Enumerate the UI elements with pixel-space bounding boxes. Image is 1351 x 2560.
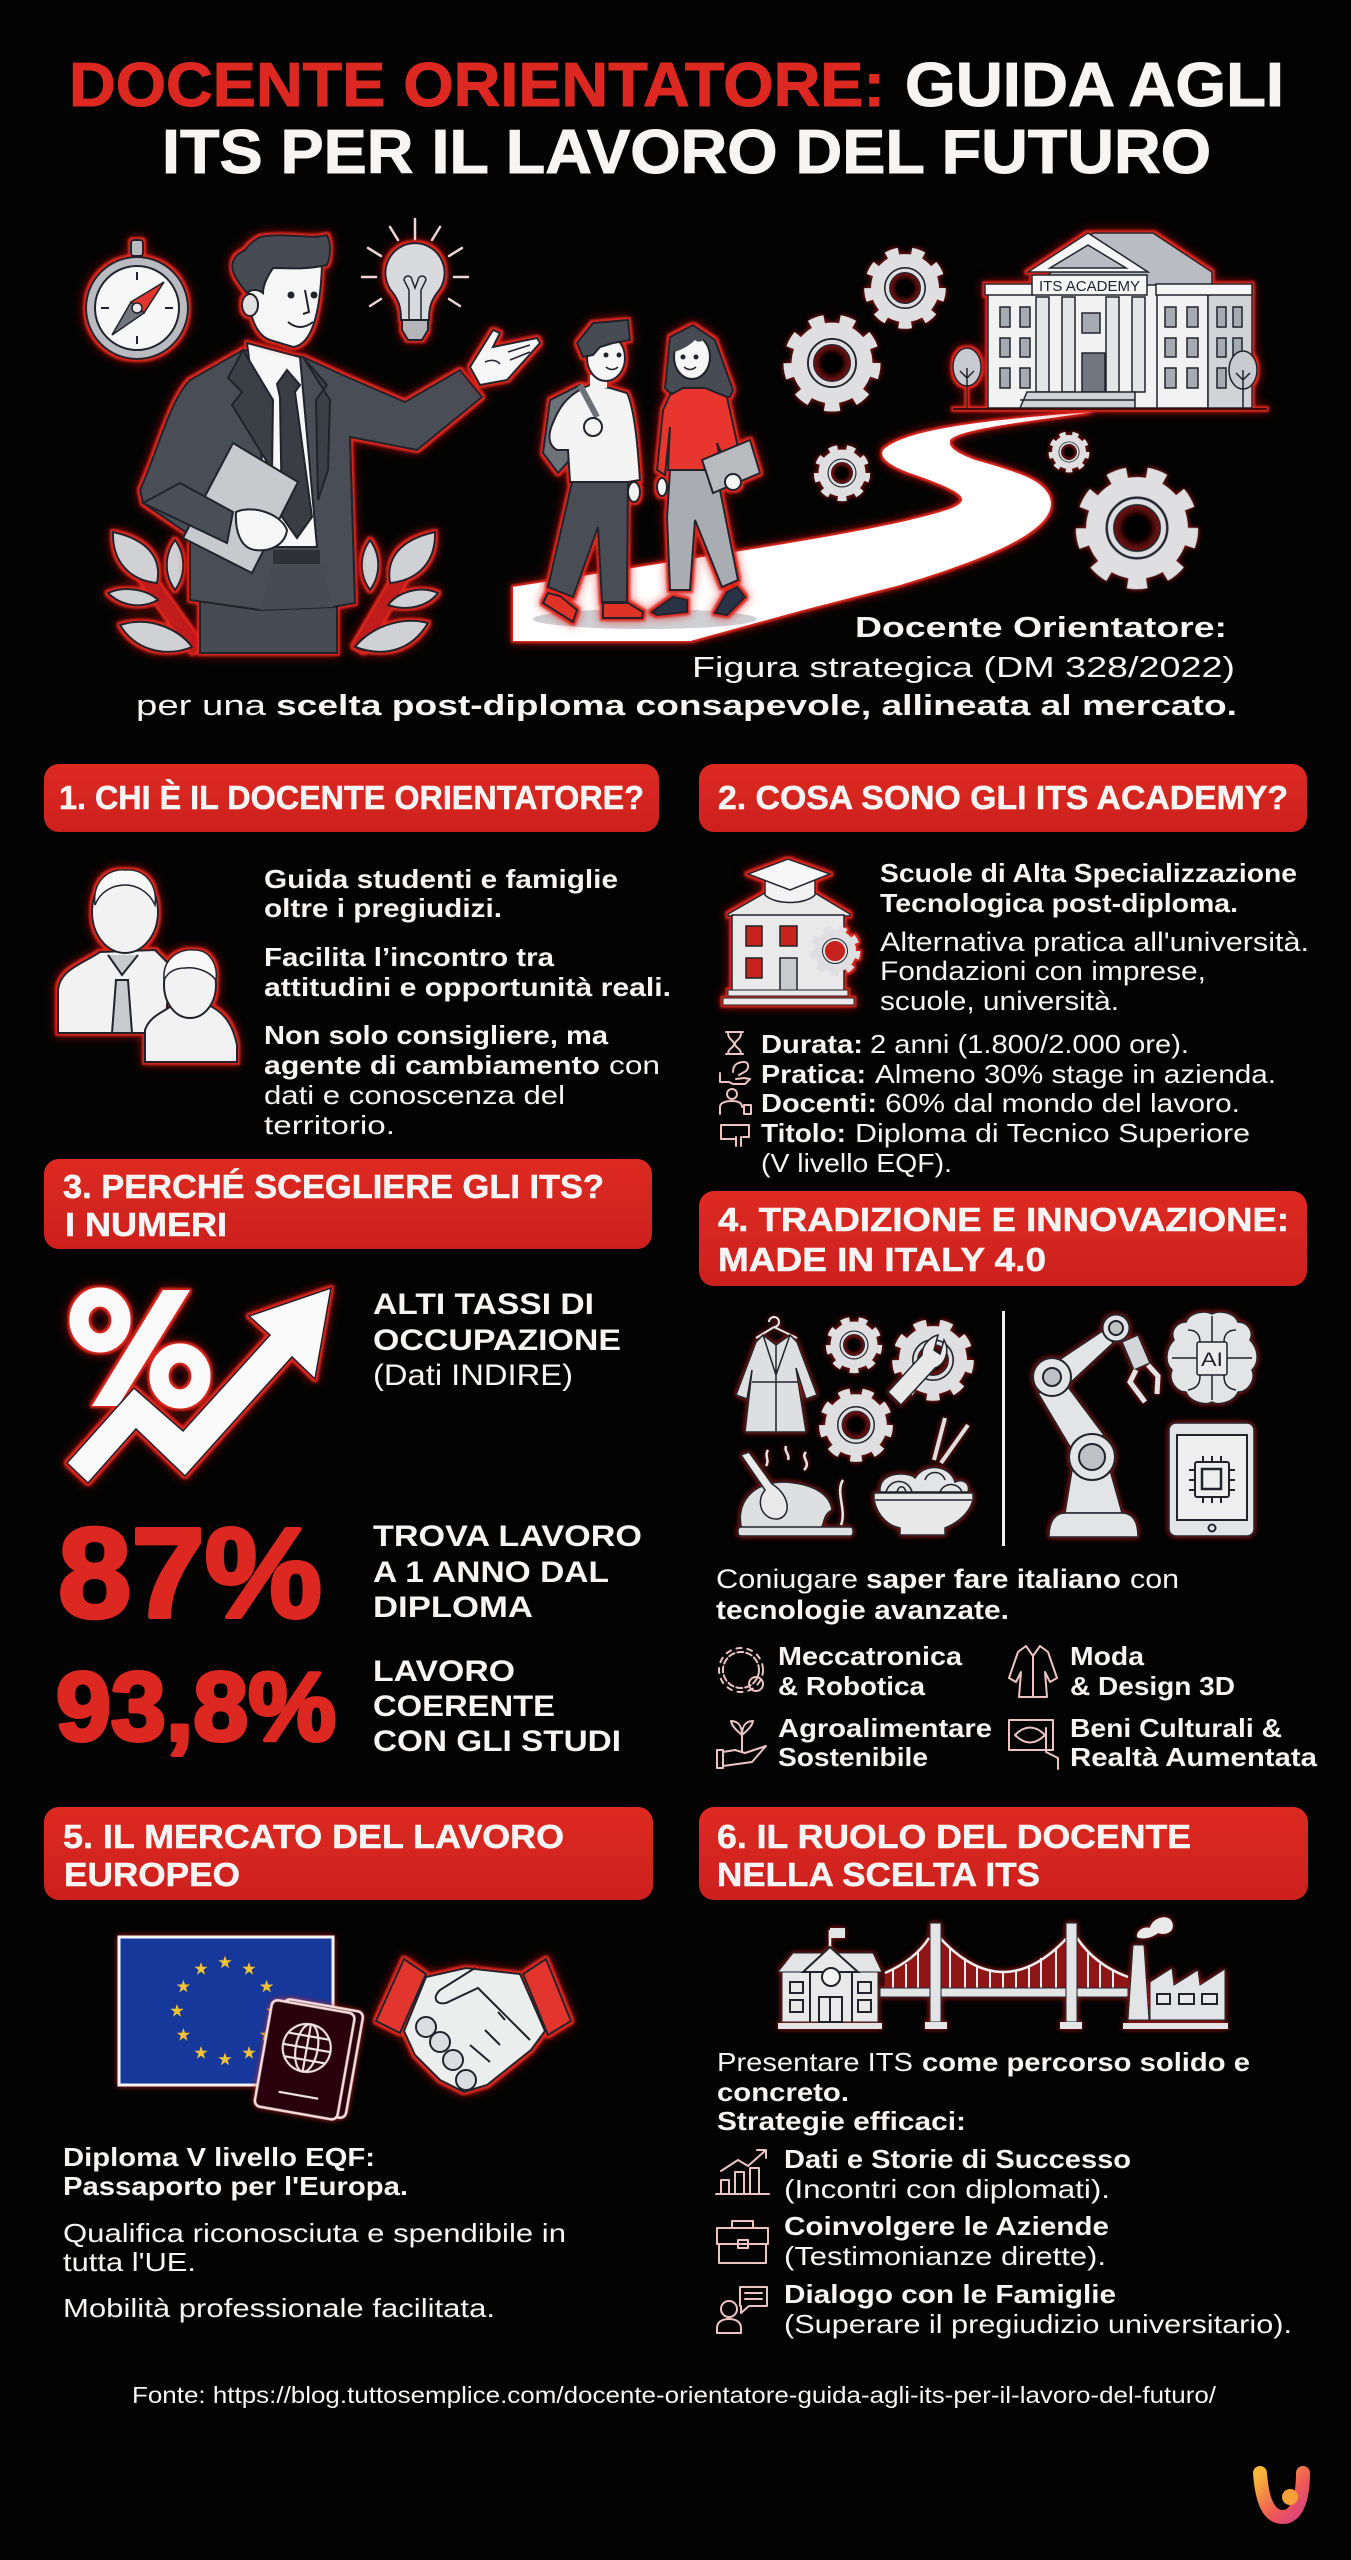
list icons: [720, 1032, 751, 1146]
facts list: 2 anni (1.800/2.000 ore).: [870, 1029, 1189, 1059]
heading 5: 5. IL MERCATO DEL LAVORO: [63, 1818, 564, 1855]
icon: light bulb: [362, 219, 468, 340]
facts list: Diploma di Tecnico Superiore: [855, 1118, 1250, 1148]
text block: saper fare italiano: [866, 1564, 1121, 1594]
icon: school-bridge-factory: [778, 1917, 1228, 2029]
stat: employment: (Dati INDIRE): [373, 1359, 573, 1392]
text block: [717, 2047, 1250, 2136]
source line: Fonte: https://blog.tuttosemplice.com/docente-orientatore-guida-agli-its-per-il-lavoro-del-futuro/: [132, 2382, 1217, 2408]
text block: Strategie efficaci:: [717, 2106, 966, 2136]
text block: agente di cambiamento: [264, 1050, 600, 1080]
text block: [716, 1564, 1179, 1625]
sector: moda: [1070, 1641, 1235, 1701]
text block: Alternativa pratica all'università.: [880, 927, 1309, 957]
heading 1: [44, 764, 659, 832]
sector: agroalimentare: Sostenibile: [778, 1742, 928, 1772]
stat: employment: ALTI TASSI DI: [373, 1288, 594, 1321]
divider: [1002, 1311, 1005, 1546]
text block: Tecnologica post-diploma.: [880, 888, 1238, 918]
text block: oltre i pregiudizi.: [264, 893, 502, 923]
heading 6: [699, 1807, 1308, 1900]
icon: compass: [86, 240, 188, 359]
students shadow: [533, 609, 757, 629]
strategy: families: Dialogo con le Famiglie: [784, 2279, 1116, 2309]
text block: Mobilità professionale facilitata.: [63, 2293, 495, 2323]
subtitle: Figura strategica (DM 328/2022): [692, 652, 1235, 684]
facts list: Pratica:: [761, 1059, 866, 1089]
strategy: families: [784, 2279, 1292, 2339]
heading 1: 1. CHI È IL DOCENTE ORIENTATORE?: [59, 779, 644, 816]
logo: [1260, 2473, 1303, 2517]
stat: 87%: 87%: [58, 1502, 322, 1645]
heading 2: 2. COSA SONO GLI ITS ACADEMY?: [718, 779, 1288, 816]
text block: dati e conoscenza del: [264, 1080, 565, 1110]
icon: percent and rising arrow: [67, 1288, 331, 1483]
icon: robe: [736, 1317, 817, 1432]
facts list: [761, 1029, 1276, 1178]
panel: cosa sono gli ITS Academy: [699, 764, 1309, 1178]
stat: 87%: TROVA LAVORO: [373, 1520, 642, 1553]
stat: 93,8%: CON GLI STUDI: [373, 1725, 621, 1758]
icon: school: [778, 1928, 882, 2029]
head: [232, 235, 330, 347]
icon: EU flag: [119, 1937, 333, 2085]
icon: robot arm: [1033, 1314, 1158, 1537]
panel: ruolo del docente: [699, 1807, 1308, 2339]
student: boy: [543, 320, 643, 622]
text block: Passaporto per l'Europa.: [63, 2171, 408, 2201]
heading 5: EUROPEO: [64, 1856, 240, 1893]
icon: AI brain: AI: [1201, 1350, 1223, 1371]
text block: concreto.: [717, 2077, 849, 2107]
facts list: Almeno 30% stage in azienda.: [875, 1059, 1276, 1089]
icon: growth chart: [716, 2150, 769, 2194]
stat: 87%: [58, 1502, 642, 1645]
text block: Presentare ITS: [717, 2047, 913, 2077]
icon: briefcase: [717, 2221, 768, 2263]
title: ITS PER IL LAVORO DEL FUTURO: [162, 118, 1211, 187]
panel: perché scegliere gli ITS: [44, 1159, 652, 1761]
icon: chicken: [738, 1446, 853, 1536]
subtitle: [136, 612, 1237, 722]
heading 3: I NUMERI: [65, 1206, 227, 1243]
icon: person with speech bubble: [717, 2287, 767, 2333]
panel: chi è il docente orientatore: [44, 764, 671, 1140]
stat: 93,8%: LAVORO: [373, 1655, 515, 1688]
text block: come percorso solido e: [922, 2047, 1250, 2077]
text block: Coniugare: [716, 1564, 858, 1594]
sector: moda: Moda: [1070, 1641, 1145, 1671]
text block: attitudini e opportunità reali.: [264, 972, 671, 1002]
icon: gears and wrench: [824, 1320, 969, 1457]
title: GUIDA AGLI: [905, 51, 1284, 120]
hero illustration: [86, 219, 1267, 653]
text block: con: [1130, 1564, 1179, 1594]
sector: meccatronica: & Robotica: [778, 1671, 926, 1701]
gears: [790, 252, 1190, 581]
winding road: [513, 412, 1093, 641]
icon: AR screen with eye: [1009, 1720, 1058, 1769]
stat: employment: OCCUPAZIONE: [373, 1324, 621, 1357]
text block: Facilita l’incontro tra: [264, 942, 555, 972]
icon: handshake: [376, 1959, 571, 2092]
text block: Scuole di Alta Specializzazione: [880, 858, 1297, 888]
facts list: Docenti:: [761, 1088, 877, 1118]
text block: Qualifica riconosciuta e spendibile in: [63, 2218, 566, 2248]
icon: AI brain: [1167, 1312, 1257, 1404]
heading 4: MADE IN ITALY 4.0: [718, 1241, 1046, 1278]
sector: meccatronica: Meccatronica: [778, 1641, 963, 1671]
icon: passport: [254, 1996, 364, 2122]
text block: [264, 864, 671, 1140]
facts list: Durata:: [761, 1029, 863, 1059]
text block: [63, 2142, 566, 2323]
text block: [880, 858, 1309, 1016]
icon: factory: [1123, 1917, 1228, 2029]
heading 3: 3. PERCHÉ SCEGLIERE GLI ITS?: [63, 1168, 604, 1205]
text block: territorio.: [264, 1110, 395, 1140]
icon: noodle bowl: [874, 1418, 973, 1535]
facts list: (V livello EQF).: [761, 1148, 952, 1178]
text block: Guida studenti e famiglie: [264, 864, 618, 894]
strategy: companies: Coinvolgere le Aziende: [784, 2211, 1109, 2241]
heading 6: NELLA SCELTA ITS: [717, 1856, 1040, 1893]
sector: agroalimentare: [778, 1713, 992, 1772]
subtitle: scelta post-diploma consapevole, allineata al mercato.: [276, 690, 1237, 722]
open hand: [470, 330, 540, 385]
stat: 93,8%: 93,8%: [56, 1652, 336, 1761]
text block: Diploma V livello EQF:: [63, 2142, 375, 2172]
subtitle: per una: [136, 690, 267, 722]
text block: Fondazioni con imprese,: [880, 956, 1206, 986]
stat: 93,8%: COERENTE: [373, 1690, 555, 1723]
heading 2: [699, 764, 1307, 832]
sector: beni culturali: Beni Culturali &: [1070, 1713, 1282, 1743]
heading 4: 4. TRADIZIONE E INNOVAZIONE:: [718, 1201, 1289, 1238]
stat: 87%: A 1 ANNO DAL: [373, 1556, 609, 1589]
facts list: 60% dal mondo del lavoro.: [885, 1088, 1240, 1118]
title: [69, 51, 1284, 187]
stat: 87%: DIPLOMA: [373, 1591, 533, 1624]
panel: mercato del lavoro europeo: [44, 1807, 653, 2323]
sectors grid: [717, 1641, 1318, 1772]
heading 5: [44, 1807, 653, 1900]
icon: coat: [1009, 1646, 1057, 1697]
icon: plant in hand: [717, 1721, 766, 1768]
text block: scuole, università.: [880, 986, 1119, 1016]
title: DOCENTE ORIENTATORE:: [69, 51, 885, 120]
sector: beni culturali: Realtà Aumentata: [1070, 1742, 1318, 1772]
tradition icons: [736, 1317, 973, 1536]
sector: beni culturali: [1070, 1713, 1318, 1772]
strategy: data: Dati e Storie di Successo: [784, 2144, 1131, 2174]
stat: employment: [373, 1288, 621, 1392]
heading 6: 6. IL RUOLO DEL DOCENTE: [717, 1818, 1191, 1855]
building sign: ITS ACADEMY: [1039, 278, 1140, 295]
facts list: Titolo:: [761, 1118, 846, 1148]
suit: [140, 343, 482, 653]
sector: agroalimentare: Agroalimentare: [778, 1713, 992, 1743]
icon: teacher and student: [58, 870, 237, 1062]
leaves: [108, 532, 438, 652]
strategy: data: (Incontri con diplomati).: [784, 2174, 1110, 2204]
teacher figure: [108, 235, 540, 653]
ITS Academy building: [953, 233, 1267, 409]
text block: con: [609, 1050, 660, 1080]
strategy: data: [784, 2144, 1131, 2204]
folder and hand: [143, 443, 298, 573]
strategy: companies: [784, 2211, 1109, 2271]
heading 3: [44, 1159, 652, 1249]
heading 4: [699, 1191, 1307, 1286]
text block: tecnologie avanzate.: [716, 1595, 1009, 1625]
sector: moda: & Design 3D: [1070, 1671, 1235, 1701]
strategy: families: (Superare il pregiudizio universitario).: [784, 2309, 1292, 2339]
icon: school with cap and gear: [723, 859, 857, 1005]
icon: tablet with chip: [1169, 1423, 1254, 1536]
innovation icons: [1033, 1312, 1257, 1537]
subtitle: Docente Orientatore:: [855, 612, 1227, 644]
strategy: companies: (Testimonianze dirette).: [784, 2241, 1106, 2271]
icon: gear 3D: [719, 1648, 763, 1692]
text block: tutta l'UE.: [63, 2247, 196, 2277]
text block: Non solo consigliere, ma: [264, 1020, 609, 1050]
stat: 93,8%: [56, 1652, 621, 1761]
student: girl: [652, 325, 760, 615]
panel: tradizione e innovazione: [699, 1191, 1318, 1772]
sector: meccatronica: [778, 1641, 963, 1701]
